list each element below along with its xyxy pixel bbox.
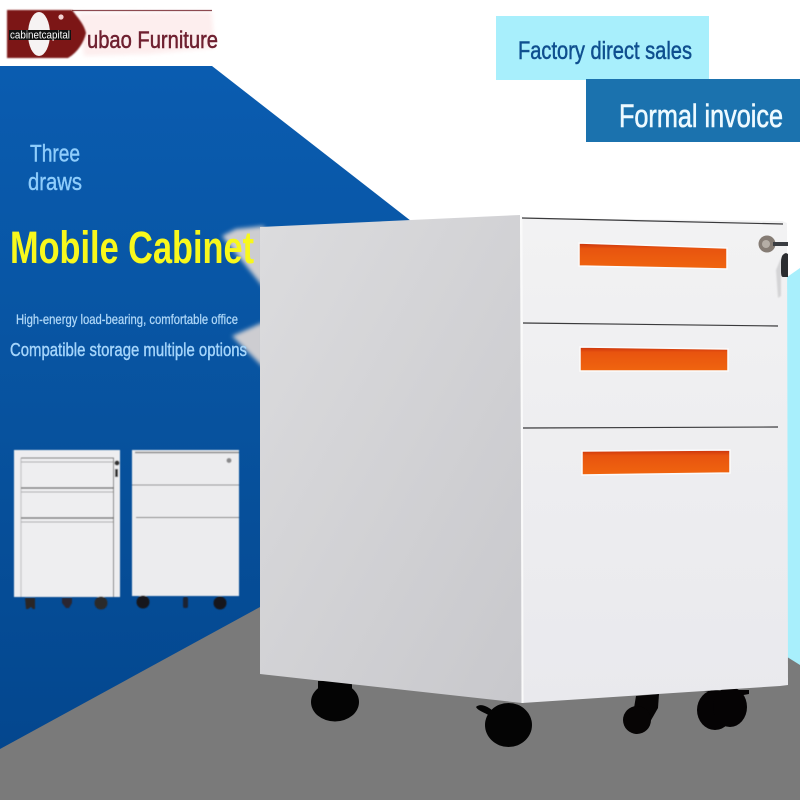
logo banner: ubao Furniture <box>87 27 218 54</box>
blurred haze near cabinet middle <box>232 322 264 368</box>
cabinet front panel <box>522 218 788 703</box>
thumbnail: cabinet front with open lock <box>14 450 120 610</box>
background: grey floor <box>0 607 800 800</box>
logo banner <box>7 10 218 58</box>
logo banner: cabinetcapital <box>10 30 70 42</box>
drawer seam: lower <box>523 427 778 428</box>
caster: rear right <box>697 687 749 730</box>
subtitle: three draws <box>28 140 82 196</box>
main title: Mobile Cabinet <box>10 222 254 273</box>
corner highlight <box>522 216 523 703</box>
subtitle: three draws: Three <box>30 140 80 168</box>
handle: bottom drawer <box>582 450 730 475</box>
caster: front right narrow <box>623 694 659 734</box>
tagline: load bearing: High-energy load-bearing, comfortable office <box>16 311 238 327</box>
thumbnail: cabinet closed front <box>132 450 239 610</box>
badge: factory direct sales <box>496 16 709 80</box>
caster: front centre <box>476 703 532 747</box>
drawer seam: middle <box>523 323 778 326</box>
blurred haze near cabinet top <box>222 226 264 288</box>
main cabinet photo <box>260 215 788 747</box>
background: cyan accent panel <box>760 268 800 680</box>
cabinet side panel <box>260 215 522 703</box>
handle: middle drawer <box>580 347 728 371</box>
drawer seam: top <box>522 218 783 224</box>
background: blue diagonal panel <box>0 66 420 790</box>
subtitle: three draws: draws <box>28 169 82 196</box>
badge: formal invoice <box>586 79 800 142</box>
handle: top drawer <box>579 243 727 269</box>
lock and key <box>758 236 788 298</box>
caster: rear left <box>311 681 359 722</box>
badge: factory direct sales: Factory direct sales <box>518 37 692 65</box>
tagline: storage: Compatible storage multiple options <box>10 340 247 360</box>
